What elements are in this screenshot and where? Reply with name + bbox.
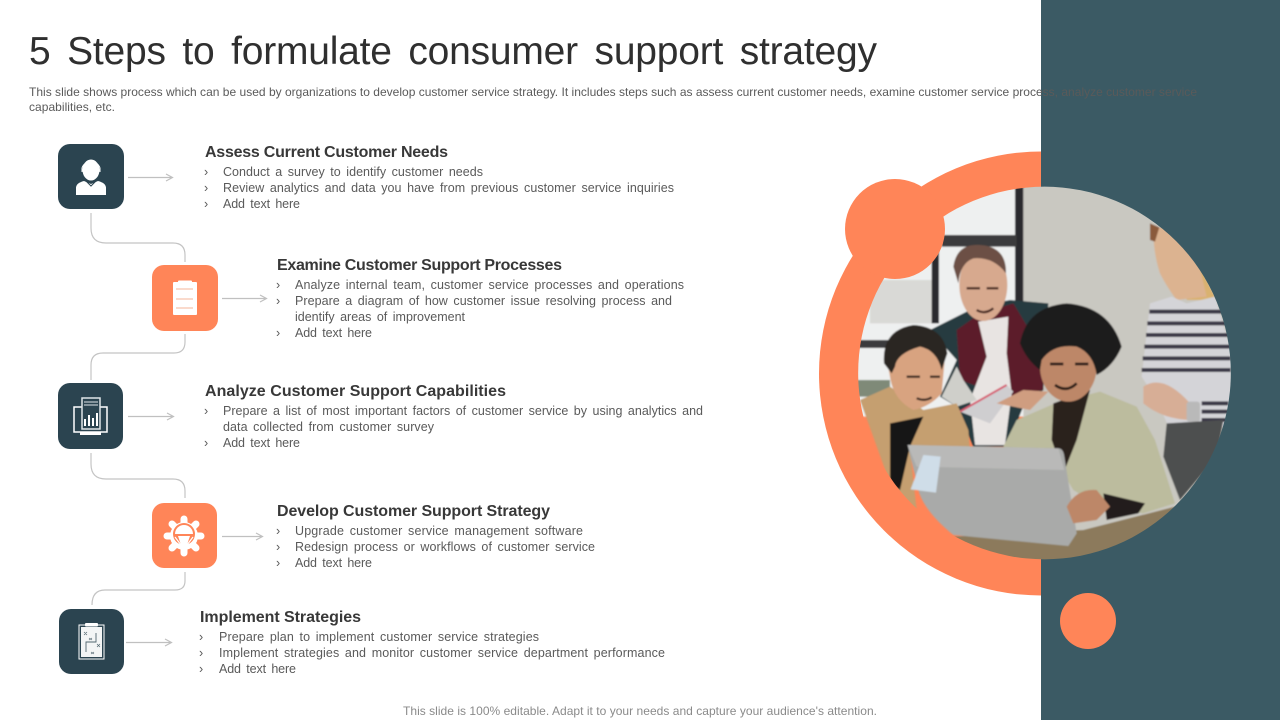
bullet list: Prepare a list of most important factors of customer service by using analytics and [223, 404, 703, 418]
bullet list: Implement strategies and monitor customer service department performance [219, 646, 665, 660]
arrow [222, 295, 266, 302]
arrow [126, 639, 172, 646]
table [954, 506, 1174, 560]
standing woman, centre [930, 300, 1048, 447]
step 3: analyze customer support capabilities [58, 383, 703, 450]
bullet list [204, 165, 674, 211]
laptop [908, 445, 1077, 546]
bullet list [276, 524, 595, 570]
bullet list: Conduct a survey to identify customer needs [223, 165, 483, 179]
step 4: develop customer support strategy [152, 503, 595, 570]
bullet list [199, 630, 665, 676]
bullet list [276, 278, 684, 340]
wall [1023, 183, 1237, 563]
step 1: assess current customer needs [58, 144, 674, 211]
heading: Assess Current Customer Needs [205, 144, 448, 161]
seated woman [1003, 392, 1175, 513]
bullet list [204, 404, 703, 450]
bullet list: Add text here [295, 326, 372, 340]
orange ring behind photo [819, 152, 1041, 596]
bullet list: › [276, 294, 280, 308]
subtitle description: capabilities, etc. [29, 100, 115, 114]
notebook [960, 385, 1013, 423]
bullet list: › [276, 326, 280, 340]
connector: step 2 to step 3 [91, 334, 185, 380]
bullet list: › [204, 165, 208, 179]
bullet list: › [276, 556, 280, 570]
icon: monitor with report [58, 383, 123, 449]
bullet list: data collected from customer survey [223, 420, 435, 434]
footer note: This slide is 100% editable. Adapt it to your needs and capture your audience's attention. [403, 704, 877, 718]
bullet list: › [204, 197, 208, 211]
arrow [222, 533, 262, 540]
bullet list: Add text here [219, 662, 296, 676]
connector: step 3 to step 4 [91, 453, 185, 498]
connector: step 1 to step 2 [91, 213, 185, 262]
bullet list: Add text here [295, 556, 372, 570]
standing woman, right [1186, 270, 1216, 301]
arrow [128, 413, 174, 420]
arrow [128, 174, 172, 181]
bullet list: Upgrade customer service management software [295, 524, 583, 538]
bullet list: Redesign process or workflows of customer service [295, 540, 595, 554]
bullet list: Add text here [223, 197, 300, 211]
icon: gear with light bulb [152, 503, 217, 568]
icon: strategy clipboard [59, 609, 124, 674]
heading: Examine Customer Support Processes [277, 257, 562, 274]
bullet list: Analyze internal team, customer service processes and operations [295, 278, 684, 292]
hand [1067, 490, 1110, 523]
connector: step 4 to step 5 [92, 572, 185, 605]
photo: team around a laptop [857, 183, 1237, 573]
window frames [1015, 183, 1023, 317]
bullet list: Review analytics and data you have from previous customer service inquiries [223, 181, 674, 195]
seated man [860, 387, 970, 510]
bullet list: › [204, 181, 208, 195]
bullet list: › [276, 278, 280, 292]
heading: Analyze Customer Support Capabilities [205, 383, 506, 400]
heading: Implement Strategies [200, 609, 361, 626]
window background [857, 183, 1027, 417]
heading: Develop Customer Support Strategy [277, 503, 550, 520]
bullet list: › [199, 630, 203, 644]
bullet list: › [199, 646, 203, 660]
step 5: implement strategies [59, 609, 665, 676]
bullet list: identify areas of improvement [295, 310, 466, 324]
step 2: examine customer support processes [152, 257, 684, 340]
orange circle accent, top left of ring [845, 179, 945, 279]
icon: customer support agent [58, 144, 124, 209]
bullet list: › [204, 436, 208, 450]
icon: clipboard checklist [152, 265, 218, 331]
bullet list: › [276, 524, 280, 538]
bullet list: Add text here [223, 436, 300, 450]
subtitle description [29, 85, 1197, 114]
subtitle description: This slide shows process which can be used by organizations to develop customer service strategy. It includes steps such as assess current customer needs, examine customer service process, analyze customer service [29, 85, 1197, 99]
panel: teal right side band [1041, 0, 1280, 720]
bullet list: › [276, 540, 280, 554]
bullet list: › [199, 662, 203, 676]
orange circle accent, on teal band [1060, 593, 1116, 649]
bullet list: Prepare a diagram of how customer issue resolving process and [295, 294, 672, 308]
bullet list: › [204, 404, 208, 418]
bullet list: Prepare plan to implement customer service strategies [219, 630, 539, 644]
title: 5 Steps to formulate consumer support strategy [29, 30, 878, 73]
